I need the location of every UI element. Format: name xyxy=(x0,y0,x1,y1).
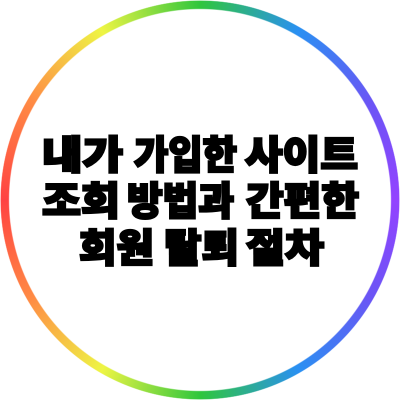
title: 간편한 xyxy=(246,181,359,224)
title: 방법과 xyxy=(127,181,234,224)
title: 회원 xyxy=(79,228,154,271)
title: 내가 xyxy=(42,135,123,178)
title: 탈퇴 xyxy=(164,228,239,271)
title: 가입한 xyxy=(134,135,237,178)
title: 절차 xyxy=(246,228,324,271)
title: 조회 xyxy=(42,181,120,224)
title: 사이트 xyxy=(245,135,358,178)
